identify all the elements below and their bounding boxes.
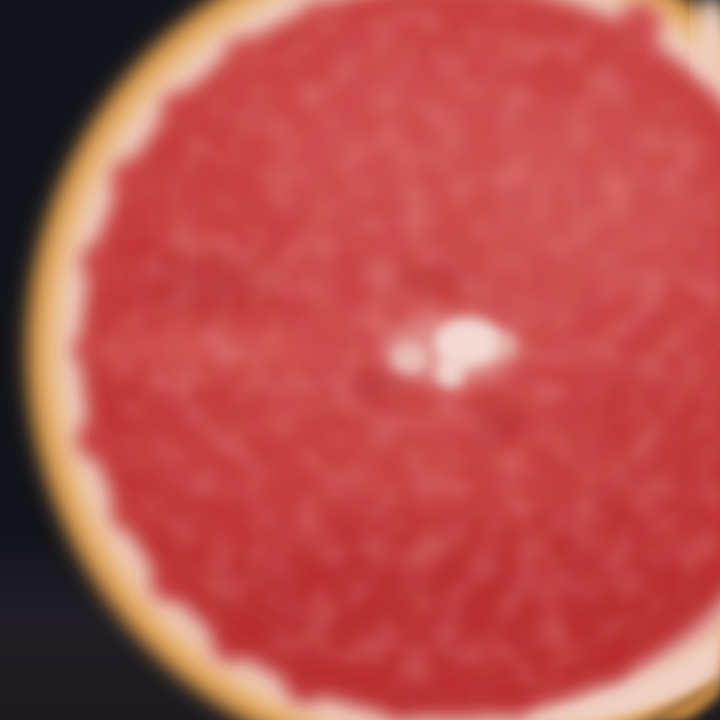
pale core halo	[382, 314, 518, 386]
pith highlight top right	[696, 0, 720, 75]
upper right light patch	[490, 100, 710, 280]
left dark patch	[135, 255, 275, 315]
upper centre light patch	[250, 50, 550, 210]
dark shadows around core	[352, 268, 524, 446]
segment membranes	[110, 30, 720, 670]
pith highlight bottom right	[520, 632, 720, 720]
lower dark red patch	[210, 510, 720, 670]
rind bottom right corner	[650, 674, 720, 720]
white centre	[392, 319, 516, 387]
left mid light patch	[100, 324, 320, 376]
right dark patch	[550, 350, 720, 550]
